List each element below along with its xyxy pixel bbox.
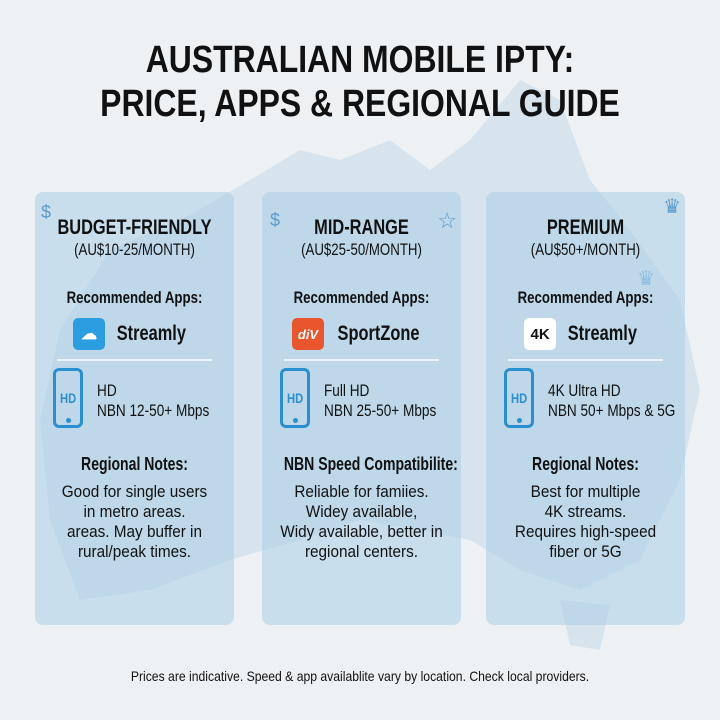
icon: crown: ♛ <box>663 196 681 218</box>
icon: phone HD: HD <box>287 390 303 406</box>
app: SportZone: diV <box>298 326 318 342</box>
icon: phone HD <box>280 368 310 428</box>
title: AUSTRALIAN MOBILE IPTY: <box>146 39 574 81</box>
app: SportZone: SportZone <box>338 322 419 345</box>
notes text: Requires high-speed <box>515 522 656 541</box>
spec text: NBN 50+ Mbps & 5G <box>548 401 675 420</box>
notes text: Widey available, <box>306 502 417 521</box>
app: Streamly: ☁ <box>81 326 97 343</box>
notes text: Reliable for famiies. <box>294 482 429 501</box>
notes text: regional centers. <box>305 542 418 561</box>
heading: PREMIUM <box>547 216 624 239</box>
notes text: Good for single users <box>62 482 207 501</box>
notes text: rural/peak times. <box>78 542 191 561</box>
regional heading: Regional Notes: <box>532 454 639 474</box>
icon: star: ☆ <box>437 208 457 233</box>
spec text <box>548 381 675 420</box>
notes text: areas. May buffer in <box>67 522 202 541</box>
icon: phone HD: HD <box>60 390 76 406</box>
spec text: NBN 12-50+ Mbps <box>97 401 209 420</box>
icon: dollar: $ <box>270 210 280 230</box>
spec text <box>97 381 209 420</box>
panel: premium <box>486 192 685 625</box>
price: (AU$50+/MONTH) <box>531 240 640 259</box>
notes text <box>515 482 656 561</box>
icon: crown: ♛ <box>637 268 655 290</box>
notes text: Best for multiple <box>531 482 640 501</box>
spec text: NBN 25-50+ Mbps <box>324 401 436 420</box>
notes text: fiber or 5G <box>549 542 622 561</box>
icon: phone HD <box>504 368 534 428</box>
app: 4K Streamly: Streamly <box>568 322 637 345</box>
title: PRICE, APPS & REGIONAL GUIDE <box>100 83 620 125</box>
app: Streamly: Streamly <box>117 322 186 345</box>
app: SportZone <box>292 318 419 350</box>
app: Streamly <box>73 318 186 350</box>
title <box>100 39 620 125</box>
icon: phone HD <box>53 368 83 428</box>
spec text: Full HD <box>324 381 369 400</box>
heading: BUDGET-FRIENDLY <box>57 216 212 239</box>
regional heading: NBN Speed Compatibilite: <box>284 454 458 474</box>
price: (AU$10-25/MONTH) <box>74 240 195 259</box>
app: 4K Streamly <box>524 318 637 350</box>
notes text <box>62 482 207 561</box>
notes text: Widy available, better in <box>280 522 443 541</box>
panel: mid-range <box>262 192 461 625</box>
spec text: 4K Ultra HD <box>548 381 621 400</box>
panel: budget-friendly <box>35 192 234 625</box>
label: Recommended Apps: <box>67 288 202 307</box>
label: Recommended Apps: <box>518 288 653 307</box>
notes text: 4K streams. <box>545 502 626 521</box>
footer note: Prices are indicative. Speed & app availablite vary by location. Check local providers. <box>131 668 589 684</box>
notes text <box>280 482 443 561</box>
price: (AU$25-50/MONTH) <box>301 240 422 259</box>
icon: phone HD: HD <box>511 390 527 406</box>
heading: MID-RANGE <box>314 216 409 239</box>
label: Recommended Apps: <box>294 288 429 307</box>
icon: dollar: $ <box>41 202 51 222</box>
spec text <box>324 381 436 420</box>
app: 4K Streamly: 4K <box>531 326 550 342</box>
spec text: HD <box>97 381 117 400</box>
regional heading: Regional Notes: <box>81 454 188 474</box>
notes text: in metro areas. <box>83 502 186 521</box>
